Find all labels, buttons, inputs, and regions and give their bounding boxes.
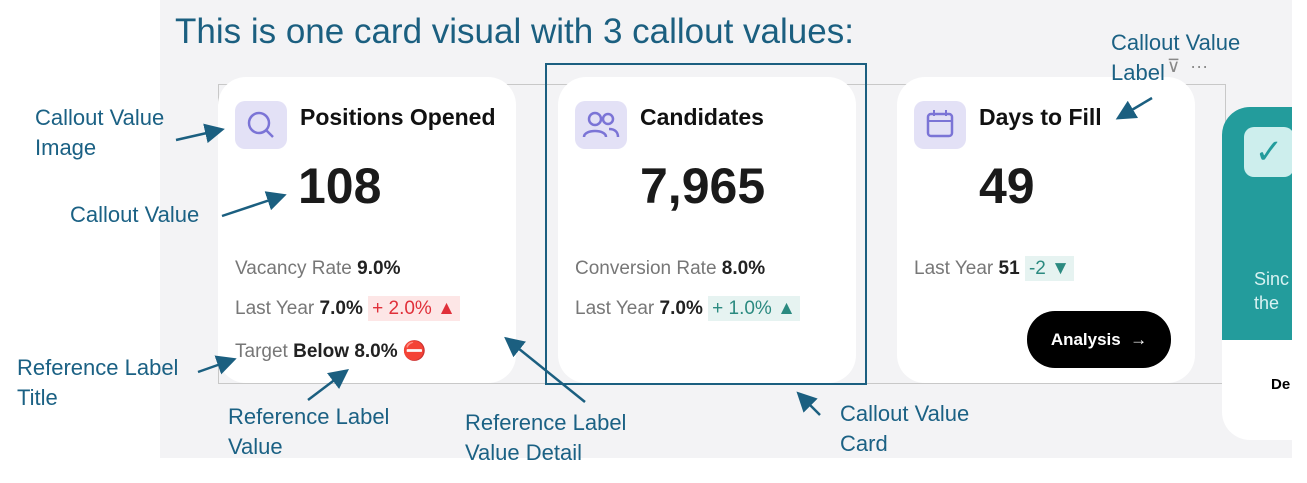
card: candidates (558, 77, 856, 383)
card: days to fill (897, 77, 1195, 383)
annotations (35, 105, 164, 160)
text: Label (1111, 60, 1165, 85)
card: positions opened: Last Year 7.0% + 2.0% ▲ (235, 298, 456, 319)
card: days to fill: Last Year 51 -2 ▼ (914, 258, 1070, 279)
icon: calendar (914, 101, 966, 149)
text: Callout Value (840, 401, 969, 426)
button: analysis (1027, 311, 1171, 368)
label: Positions Opened (300, 104, 496, 130)
teal card partial (1222, 107, 1292, 440)
card: days to fill: 49 (979, 158, 1035, 214)
title: This is one card visual with 3 callout values: (175, 12, 854, 51)
card: candidates: 7,965 (640, 158, 765, 214)
card: days to fill: Days to Fill (979, 104, 1102, 130)
text: Value Detail (465, 440, 582, 465)
text: Card (840, 431, 888, 456)
card: positions opened: Target Below 8.0% ⛔ (235, 341, 427, 362)
details: Vacancy Rate 9.0% (235, 258, 400, 279)
text: Reference Label (17, 355, 178, 380)
button: analysis: Analysis → (1051, 330, 1147, 349)
card: candidates: Conversion Rate 8.0% (575, 258, 765, 279)
text: Callout Value (1111, 30, 1240, 55)
teal card partial: Sinc (1254, 269, 1289, 289)
annotations: Callout Value (35, 105, 164, 130)
value: 108 (298, 158, 381, 214)
text: Reference Label (228, 404, 389, 429)
icon: people (575, 101, 627, 149)
card: positions opened (218, 77, 516, 383)
filter and menu icons: ⊽ ··· (1167, 56, 1208, 76)
text: Reference Label (465, 410, 626, 435)
teal card partial: De (1271, 376, 1290, 393)
annotations: Image (35, 135, 96, 160)
selection frame (218, 84, 1226, 384)
teal card partial: ✓ (1255, 133, 1283, 171)
text: Title (17, 385, 58, 410)
highlight: callout value card (545, 63, 867, 385)
teal card partial: the (1254, 293, 1279, 313)
card: candidates: Candidates (640, 104, 764, 130)
icon: search (235, 101, 287, 149)
text: Value (228, 434, 283, 459)
text: Callout Value (70, 202, 199, 227)
card: candidates: Last Year 7.0% + 1.0% ▲ (575, 298, 796, 319)
